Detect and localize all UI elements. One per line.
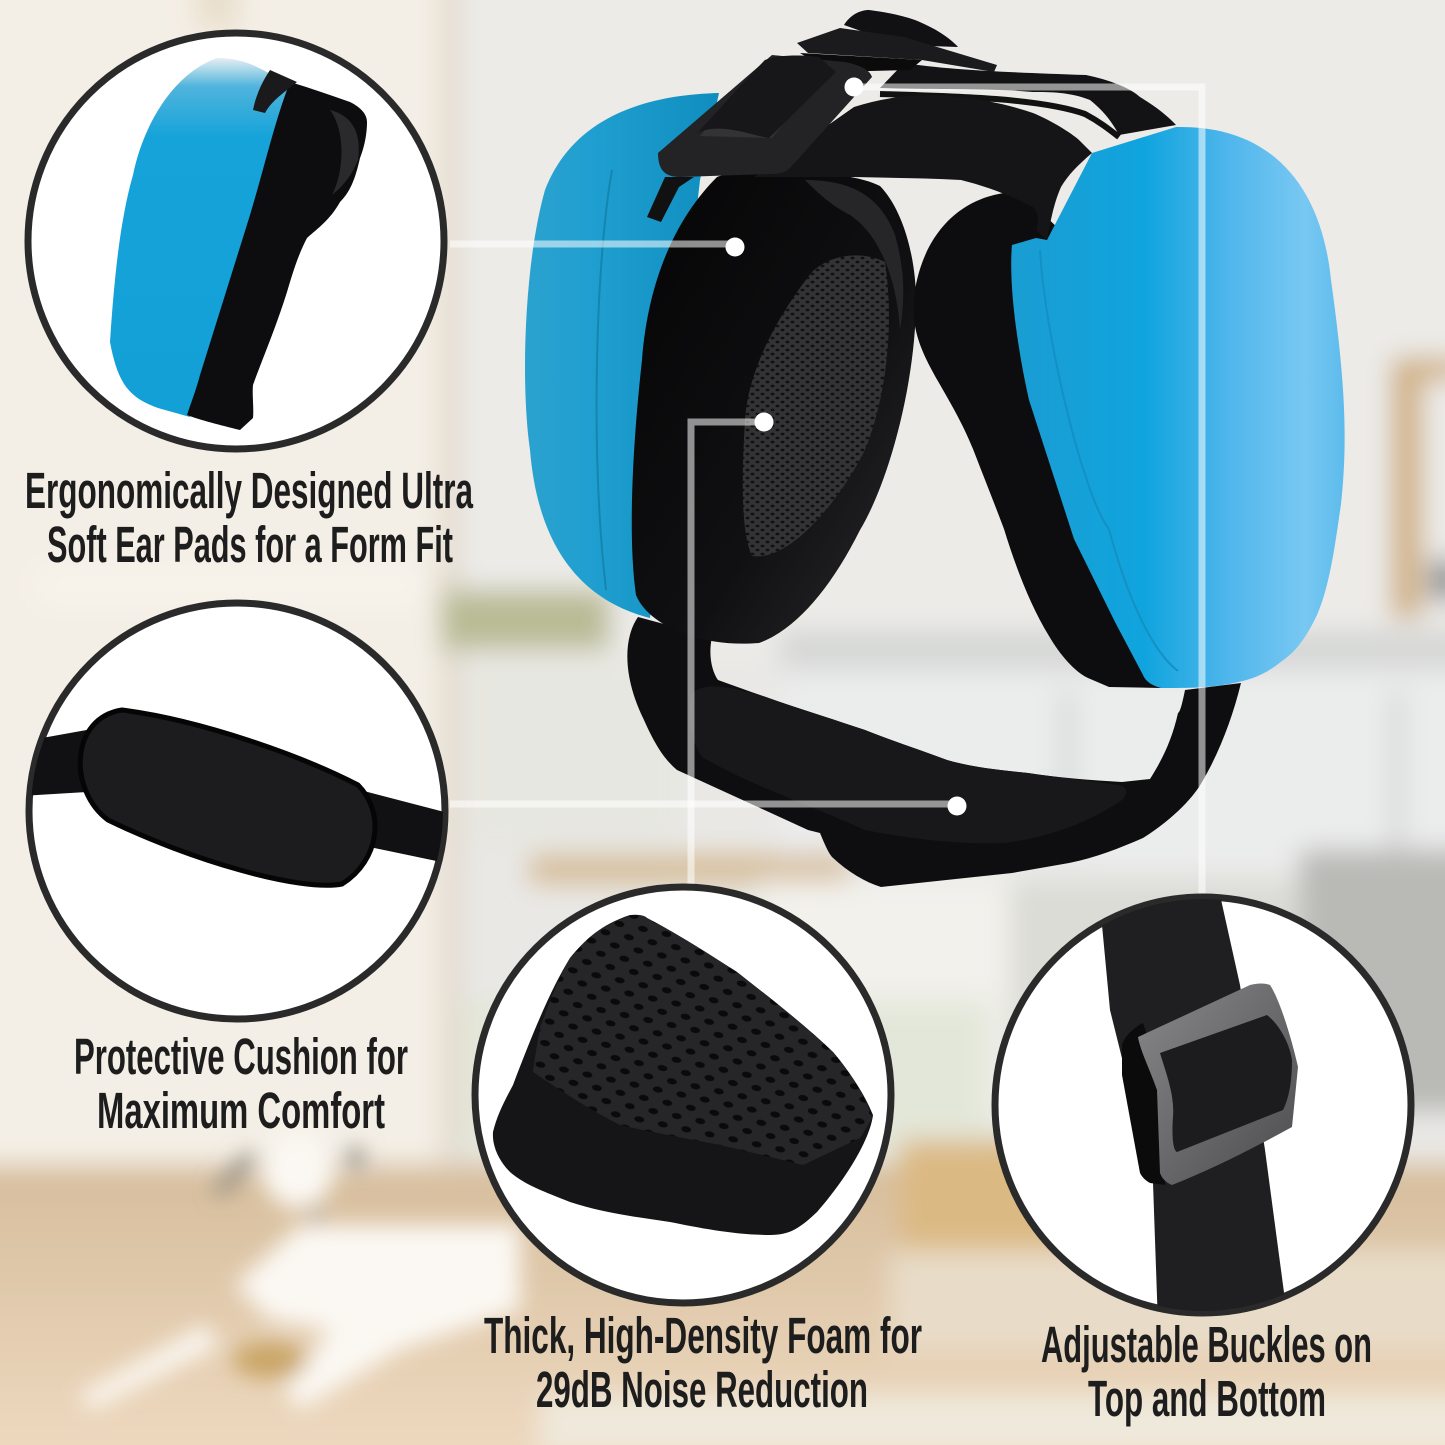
blue shell side view <box>110 58 290 417</box>
main strap buckle <box>658 55 872 177</box>
caption: foam: Thick, High-Density Foam for <box>484 1307 922 1364</box>
caption: buckles <box>1041 1316 1372 1427</box>
caption: cushion: Protective Cushion for <box>74 1028 408 1085</box>
right black ear pad <box>913 192 1161 688</box>
buckle slot strap <box>1160 1015 1292 1152</box>
caption: ear pads: Ergonomically Designed Ultra <box>25 462 473 519</box>
cushion pad <box>80 710 375 885</box>
panel: buckle <box>995 895 1411 1325</box>
foam block <box>493 915 873 1235</box>
upper headband straps <box>647 10 1176 240</box>
strap end at left cup <box>647 177 694 222</box>
buckle frame <box>1138 984 1298 1185</box>
blurred dog <box>80 1132 520 1410</box>
caption: ear pads <box>25 462 473 573</box>
caption: ear pads: Soft Ear Pads for a Form Fit <box>47 516 453 573</box>
panel: ear pad side view <box>28 33 444 449</box>
back loop strap <box>880 63 1176 135</box>
buckle black side <box>1122 1023 1170 1185</box>
caption: foam <box>484 1307 922 1418</box>
product: ear muffs <box>525 10 1345 887</box>
left black ear pad <box>632 170 916 644</box>
right blue ear cup <box>1011 127 1345 688</box>
left blue ear cup <box>525 93 719 618</box>
ear pad mesh foam <box>743 255 889 556</box>
panel: cushion <box>20 603 460 1019</box>
lower headband <box>627 617 1241 887</box>
black pad side view <box>187 82 367 430</box>
top slider buckle <box>797 28 997 72</box>
caption: cushion: Maximum Comfort <box>97 1082 385 1139</box>
strap <box>1102 895 1290 1325</box>
strap loop <box>253 70 297 113</box>
panel: foam <box>475 887 891 1303</box>
headband cushion <box>690 686 1126 843</box>
front strap <box>754 95 1092 240</box>
top soft strap <box>844 10 958 47</box>
caption: foam: 29dB Noise Reduction <box>536 1361 868 1418</box>
mesh surface <box>533 915 872 1165</box>
caption: cushion <box>74 1028 408 1139</box>
strap band <box>32 730 443 861</box>
buckle strap <box>697 55 836 138</box>
guide lines <box>450 87 1202 900</box>
guide dots <box>726 78 966 816</box>
